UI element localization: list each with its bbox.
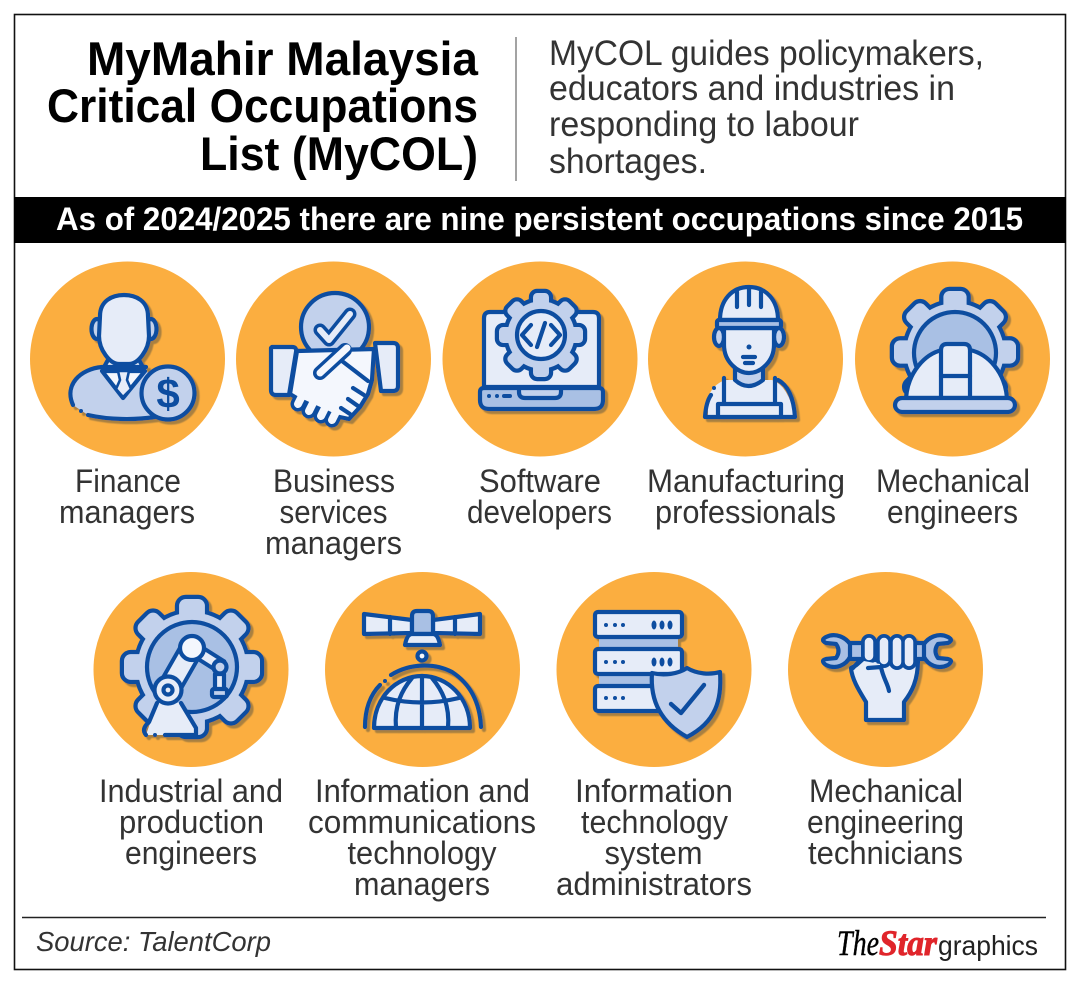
label <box>807 773 964 871</box>
label <box>876 463 1030 530</box>
label: Industrial and <box>99 773 283 809</box>
label: services <box>280 494 388 530</box>
label <box>647 463 845 530</box>
label: Information <box>575 773 733 809</box>
source: Source: TalentCorp <box>36 926 271 957</box>
label: administrators <box>556 866 752 902</box>
label: Information and <box>315 773 530 809</box>
intro text: shortages. <box>549 142 707 181</box>
label <box>99 773 283 871</box>
occupation: software developers <box>442 262 638 530</box>
icon: fist gripping wrench <box>823 635 951 722</box>
label: Mechanical <box>809 773 963 809</box>
icon: manager with dollar coin: $ <box>156 370 180 417</box>
occupation: ICT managers <box>308 572 536 902</box>
label: Business <box>273 463 395 499</box>
title <box>47 32 479 180</box>
label <box>556 773 752 902</box>
icon: worker with hard hat <box>705 287 795 417</box>
title: List (MyCOL) <box>200 127 478 180</box>
label: professionals <box>655 494 836 530</box>
banner: As of 2024/2025 there are nine persistent occupations since 2015 <box>56 201 1023 237</box>
label: Manufacturing <box>647 463 845 499</box>
label <box>467 463 612 530</box>
icon: handshake with check <box>271 293 398 420</box>
logo: The Star graphics: Star <box>879 923 938 963</box>
intro text: educators and industries in <box>549 69 955 108</box>
label: system <box>604 835 702 871</box>
intro text <box>549 34 984 181</box>
title: MyMahir Malaysia <box>87 32 479 85</box>
label: engineering <box>807 804 964 840</box>
title: Critical Occupations <box>47 79 478 132</box>
label <box>265 463 402 561</box>
label: technology <box>581 804 728 840</box>
logo: The Star graphics <box>837 923 1038 963</box>
label: Software <box>479 463 601 499</box>
label: Mechanical <box>876 463 1030 499</box>
occupation: finance managers <box>30 262 225 530</box>
label: managers <box>354 866 490 902</box>
icon: gear and hard hat <box>894 291 1016 413</box>
logo: The Star graphics: The <box>837 923 879 963</box>
label: managers <box>265 525 402 561</box>
logo: The Star graphics: graphics <box>938 930 1038 961</box>
label: Finance <box>75 463 181 499</box>
label: communications <box>308 804 536 840</box>
intro text: responding to labour <box>549 105 859 144</box>
icon: servers with shield <box>595 612 720 737</box>
label: managers <box>59 494 195 530</box>
label <box>308 773 536 902</box>
occupation: manufacturing professionals <box>647 262 845 530</box>
label: technology <box>348 835 496 871</box>
label: production <box>119 804 264 840</box>
label: engineers <box>887 494 1018 530</box>
occupation: IT system administrators <box>556 572 752 902</box>
icon: manager with dollar coin <box>70 295 194 420</box>
occupation: mechanical engineers <box>855 262 1050 530</box>
occupation: industrial and production engineers <box>94 572 288 871</box>
icon: laptop with code gear <box>480 293 603 409</box>
label: technicians <box>808 835 963 871</box>
occupation: mechanical engineering technicians <box>788 572 983 871</box>
intro text: MyCOL guides policymakers, <box>549 34 984 73</box>
icon: robot arm in gear <box>124 599 260 737</box>
occupation: business services managers <box>236 262 431 561</box>
label <box>59 463 195 530</box>
label: engineers <box>125 835 257 871</box>
label: developers <box>467 494 612 530</box>
icon: satellite over globe <box>364 611 481 728</box>
